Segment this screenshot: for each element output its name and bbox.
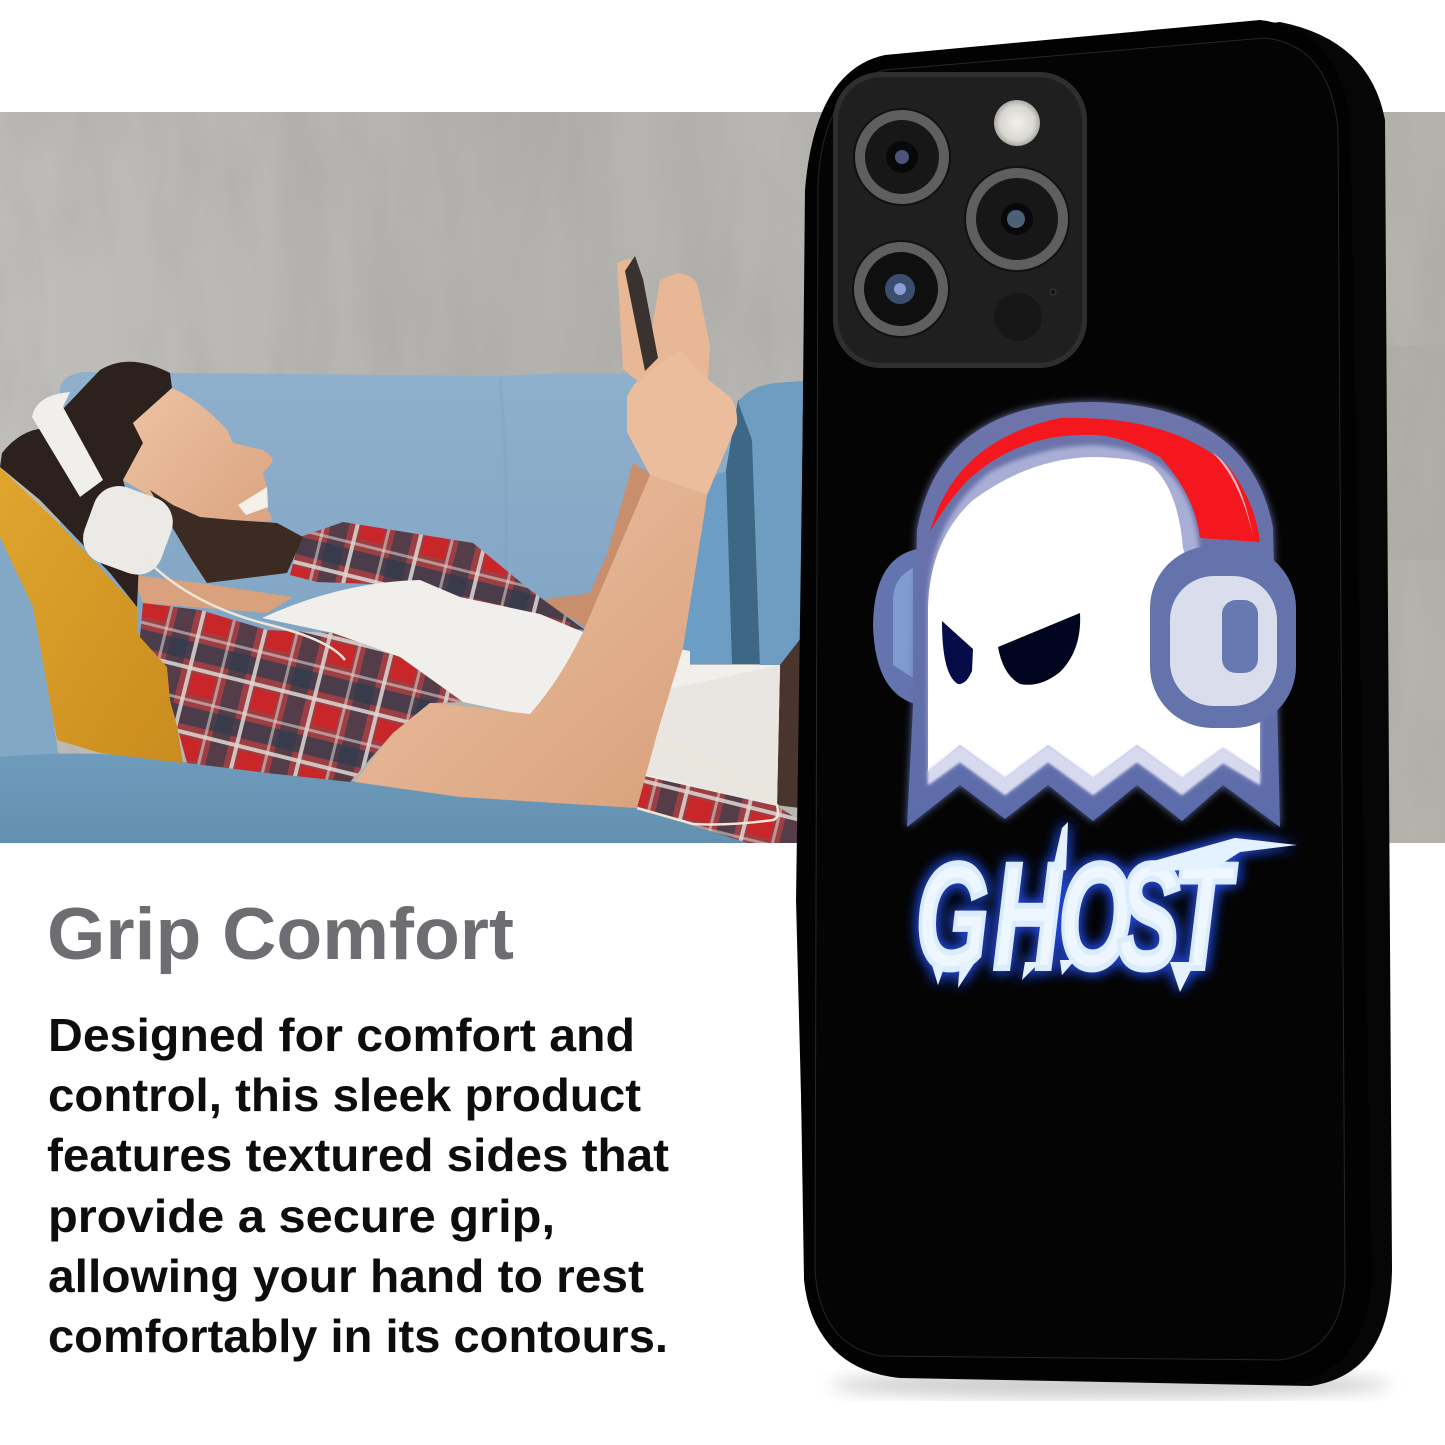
sofa back cushion bbox=[60, 372, 735, 664]
front hand bbox=[627, 350, 737, 495]
inner edge highlight bbox=[815, 38, 1345, 1360]
wall background bbox=[0, 112, 1445, 843]
plaid shirt torso bbox=[140, 603, 463, 782]
phone case bbox=[796, 20, 1392, 1386]
sensor bbox=[994, 293, 1042, 341]
heading: Grip Comfort bbox=[47, 894, 514, 975]
headphone cable bbox=[145, 558, 778, 824]
ghost logo bbox=[873, 402, 1296, 827]
sofa arm right cushion bbox=[738, 380, 815, 668]
smile bbox=[238, 487, 268, 515]
headband highlight bbox=[1213, 453, 1253, 536]
upper shirt plaid bbox=[290, 522, 585, 630]
right ear cup bbox=[1150, 546, 1296, 728]
white t-shirt bbox=[262, 580, 780, 806]
brush strokes and drips bbox=[932, 822, 1297, 992]
body text: provide a secure grip, bbox=[48, 1190, 555, 1242]
ghost outline bbox=[907, 402, 1280, 827]
lens: top left bbox=[853, 108, 951, 206]
body text bbox=[47, 1009, 669, 1362]
beard bbox=[150, 490, 303, 583]
GHOST brush lettering: GHOST bbox=[916, 833, 1237, 1000]
body text: features textured sides that bbox=[47, 1129, 669, 1181]
sofa side panel bbox=[680, 470, 735, 664]
phone bbox=[625, 256, 658, 371]
ear cup highlight bbox=[893, 568, 913, 678]
camera module bbox=[833, 72, 1087, 368]
rear arm bbox=[540, 463, 660, 630]
lower shirt tail plaid bbox=[637, 773, 815, 843]
flash bbox=[994, 100, 1040, 146]
sofa arm dark gap bbox=[726, 400, 765, 664]
photo band: man on sofa bbox=[0, 112, 1445, 843]
face bbox=[123, 388, 273, 565]
yellow pillow bbox=[0, 467, 183, 763]
body text: Designed for comfort and bbox=[48, 1009, 635, 1061]
sofa left arm bbox=[0, 530, 60, 770]
case face bbox=[798, 20, 1372, 1384]
lens: right bbox=[964, 166, 1070, 272]
ghost body bbox=[928, 457, 1260, 778]
sofa seat bbox=[0, 753, 750, 843]
body text: control, this sleek product bbox=[48, 1069, 641, 1121]
body text: allowing your hand to rest bbox=[48, 1250, 644, 1302]
case side bbox=[796, 22, 1392, 1386]
headphone cup bbox=[76, 479, 180, 582]
back hand bbox=[617, 258, 710, 400]
phone shadow bbox=[830, 1372, 1390, 1398]
back of head hair bbox=[0, 362, 172, 607]
eyes bbox=[998, 613, 1080, 685]
neck bbox=[133, 575, 293, 613]
dark trousers bbox=[776, 620, 815, 810]
lens: bottom left bbox=[852, 240, 950, 338]
left ear cup bbox=[873, 548, 925, 706]
red headband bbox=[930, 418, 1260, 542]
body text: comfortably in its contours. bbox=[48, 1310, 668, 1362]
inner lavender glow bbox=[928, 445, 1260, 795]
arm bbox=[355, 475, 707, 808]
hem shading bbox=[928, 745, 1260, 795]
headphones band bbox=[32, 392, 103, 497]
